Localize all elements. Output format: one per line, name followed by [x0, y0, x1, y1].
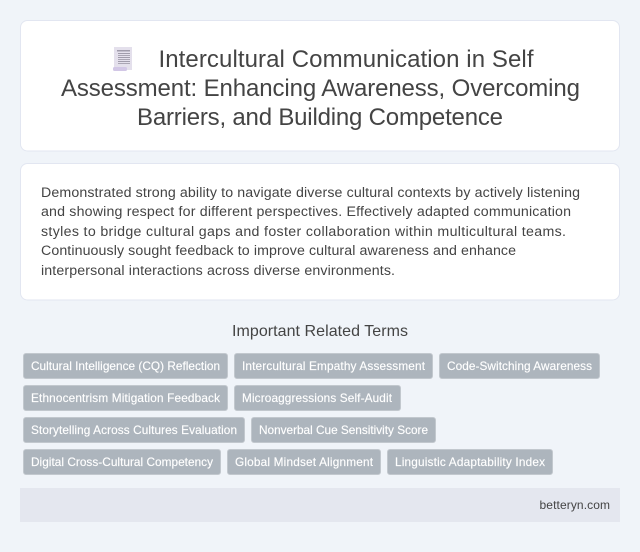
chip: [228, 450, 380, 474]
title: Barriers, and Building Competence: [137, 104, 503, 131]
title: [61, 46, 580, 131]
panel: summary text: Continuously sought feedback to improve cultural awareness and enhance: [41, 243, 516, 259]
panel: summary text: and showing respect for different perspectives. Effectively adapted communication: [41, 204, 571, 220]
chip: [234, 386, 400, 410]
chip: [252, 418, 436, 442]
chip: [24, 418, 244, 442]
footer: betteryn.com: [540, 498, 610, 512]
chip: Code-Switching Awareness: [447, 359, 592, 373]
chip: Microaggressions Self-Audit: [242, 391, 393, 405]
chip: Digital Cross-Cultural Competency: [31, 455, 213, 469]
icon: document scroll: [113, 47, 132, 71]
chip: Nonverbal Cue Sensitivity Score: [259, 423, 428, 437]
chip: [24, 354, 228, 378]
panel: title card: [20, 20, 620, 151]
chip: Ethnocentrism Mitigation Feedback: [31, 391, 220, 405]
panel: summary text: [20, 164, 620, 300]
chip: [234, 354, 432, 378]
chip: [24, 386, 228, 410]
footer: [20, 488, 620, 522]
chip group: related terms: [24, 354, 600, 474]
chip: Global Mindset Alignment: [235, 455, 374, 469]
heading: related terms: Important Related Terms: [232, 323, 408, 340]
panel: summary text: styles to bridge cultural gaps and foster collaboration within multicultural teams.: [41, 224, 566, 240]
title: Intercultural Communication in Self: [158, 46, 534, 73]
panel: summary text: interpersonal interactions across diverse environments.: [41, 263, 395, 279]
chip: Cultural Intelligence (CQ) Reflection: [31, 359, 220, 373]
title: Assessment: Enhancing Awareness, Overcoming: [61, 75, 580, 102]
panel: summary text: Demonstrated strong ability to navigate diverse cultural contexts by actively listening: [41, 185, 580, 201]
chip: Storytelling Across Cultures Evaluation: [31, 423, 237, 437]
chip: [388, 450, 552, 474]
chip: [24, 450, 220, 474]
chip: Linguistic Adaptability Index: [395, 455, 545, 469]
chip: [440, 354, 600, 378]
chip: Intercultural Empathy Assessment: [242, 359, 426, 373]
